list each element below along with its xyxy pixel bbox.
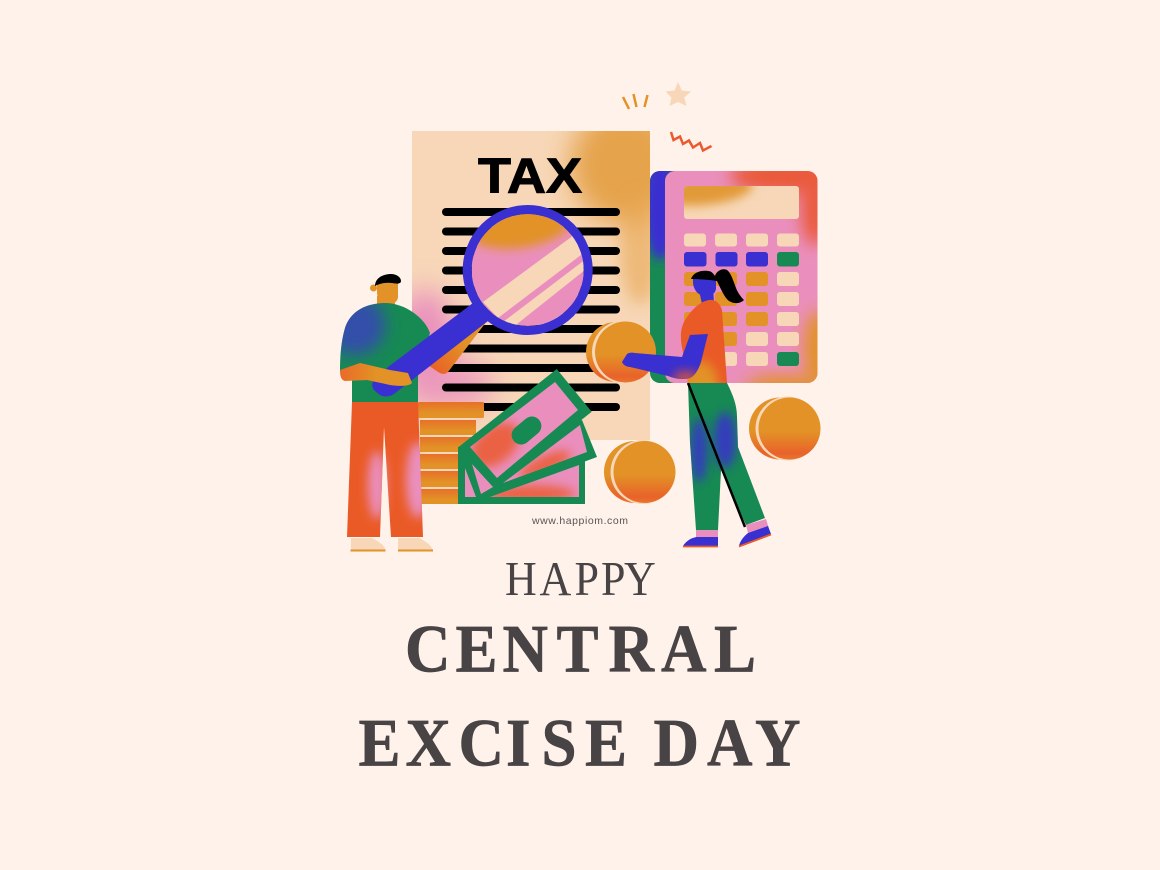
banknote centre oval	[508, 413, 545, 448]
middle banknote	[458, 420, 597, 483]
watermark url: www.happiom.com	[531, 515, 628, 527]
calculator keys	[684, 234, 799, 366]
man feet	[350, 538, 433, 552]
back banknote	[458, 447, 585, 504]
document text lines	[442, 208, 620, 411]
tax document	[412, 131, 650, 440]
woman legs	[688, 383, 765, 530]
title line: HAPPY: HAPPY	[505, 553, 656, 607]
woman shoes	[683, 526, 771, 546]
banknotes	[458, 369, 597, 504]
title	[358, 553, 800, 781]
icon: star	[666, 82, 691, 106]
left fanned note edges	[465, 464, 493, 497]
lens	[472, 214, 584, 326]
coin bottom	[604, 440, 676, 504]
woman cuffs	[696, 519, 768, 538]
calculator	[650, 171, 818, 383]
front banknote	[458, 369, 592, 487]
ring	[467, 210, 588, 330]
calculator screen	[684, 186, 799, 219]
woman head and hair	[691, 269, 744, 304]
woman figure	[622, 269, 771, 546]
icon: spark lines	[623, 94, 648, 109]
infographic canvas	[340, 82, 820, 766]
man figure	[340, 274, 433, 552]
title line: CENTRAL: CENTRAL	[405, 612, 756, 687]
right arm behind handle	[428, 310, 487, 374]
stacked coins	[418, 402, 484, 504]
magnifying glass	[372, 205, 593, 396]
title line: EXCISE DAY: EXCISE DAY	[358, 706, 800, 781]
man hand	[340, 363, 412, 386]
coin held	[586, 320, 656, 384]
man legs	[347, 402, 430, 537]
woman torso	[680, 300, 727, 383]
heading: TAX: TAX	[478, 150, 582, 204]
coin right	[749, 396, 820, 460]
handle	[372, 303, 488, 396]
man head	[370, 274, 401, 308]
calculator side	[650, 171, 675, 383]
icon: zigzag	[671, 132, 712, 150]
man shirt	[340, 303, 430, 402]
calculator body	[665, 171, 818, 383]
woman arm	[622, 334, 708, 379]
